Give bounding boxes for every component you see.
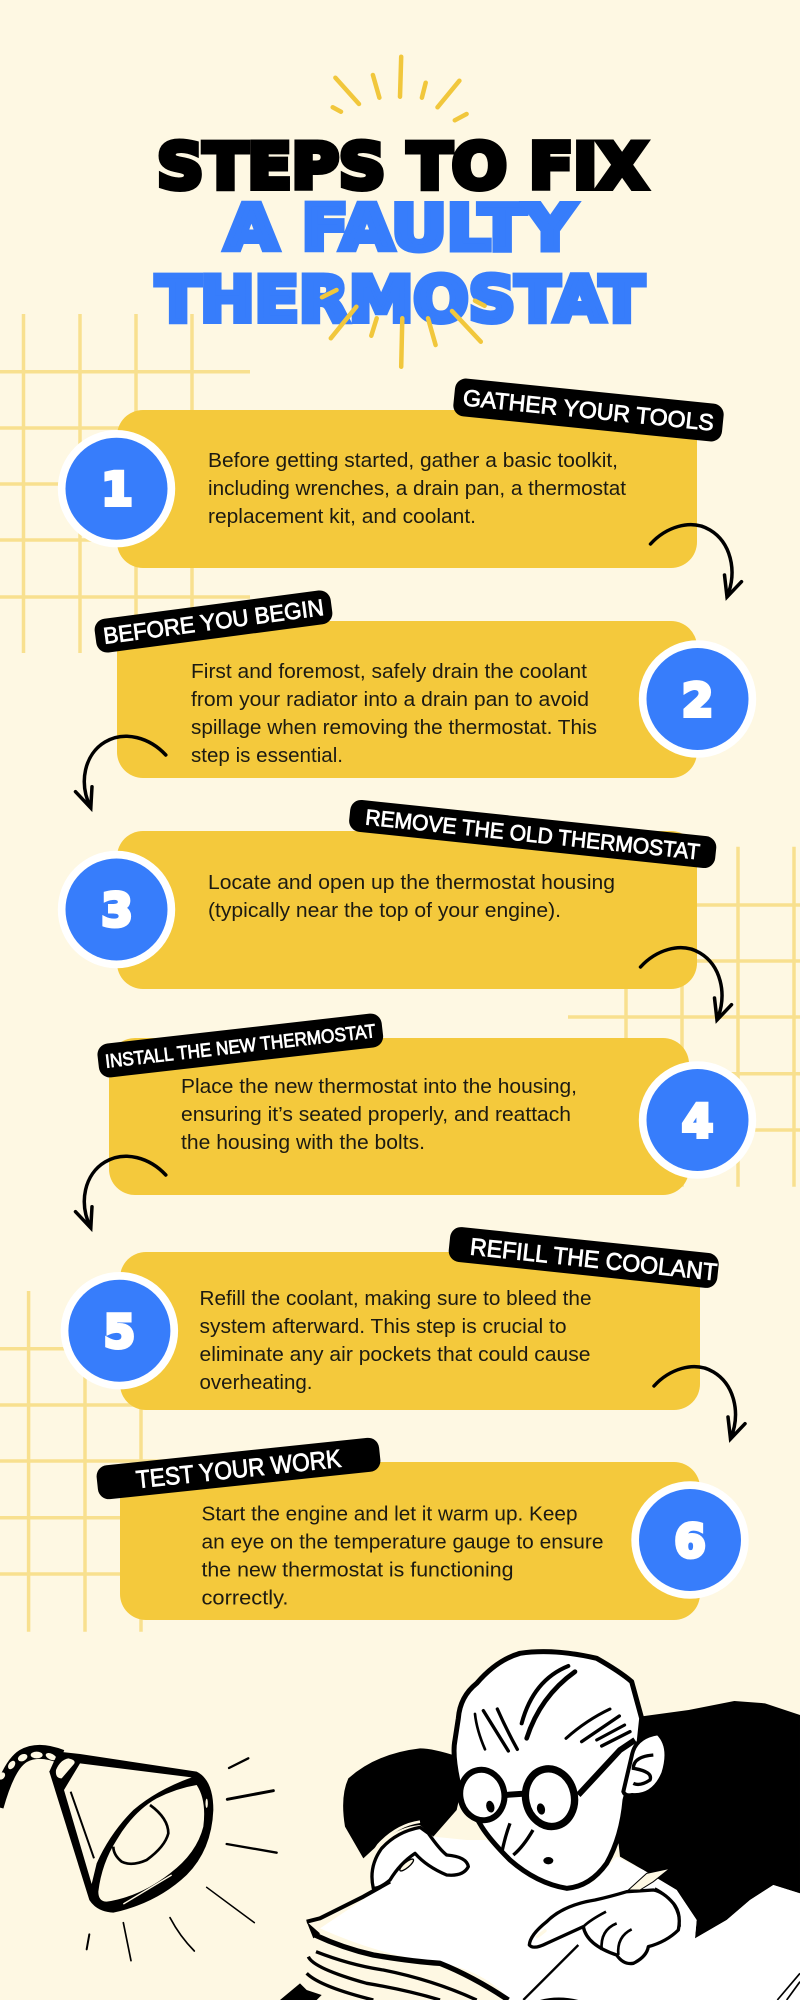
tag: refill the coolant: REFILL THE COOLANT [469,1234,719,1286]
panel: step 2: step is essential. [191,744,343,767]
sunburst: bottom rays [322,290,485,367]
tag: remove the old thermostat: REMOVE THE OLD THERMOSTAT [364,805,701,864]
arrow: step 4 to 5 [76,1156,166,1228]
title: A FAULTY [225,192,576,264]
title: STEPS TO FIX [157,130,647,203]
panel: step 4: the housing with the bolts. [181,1131,425,1154]
title [156,130,647,336]
panel: step 3: Locate and open up the thermostat housing [208,871,615,894]
panel: step 2: spillage when removing the thermostat. This [191,716,597,739]
panel: step 3 [58,799,732,1020]
panel: step 1: 1 [101,463,133,516]
panel: step 6: an eye on the temperature gauge to ensure [202,1531,604,1554]
panel: step 6: correctly. [202,1587,288,1610]
man's pointing hand [529,1890,679,1964]
panel: step 2 [76,589,756,808]
arrow: step 3 to 4 [640,948,732,1020]
panel: step 6: the new thermostat is functioning [202,1559,514,1582]
panel: step 2: 2 [682,674,713,727]
tag: test your work: TEST YOUR WORK [135,1445,343,1494]
panel: step 5: overheating. [200,1371,312,1394]
panel: step 3: (typically near the top of your engine). [208,899,561,922]
man's ear [623,1733,666,1795]
tag: install the new thermostat: INSTALL THE NEW THERMOSTAT [104,1021,377,1073]
panel: step 5: eliminate any air pockets that could cause [200,1343,590,1366]
panel: step 5: Refill the coolant, making sure to bleed the [200,1287,592,1310]
panel: step 4 [76,1012,756,1228]
man's glasses [456,1740,635,1831]
man's nose and mouth [502,1823,533,1855]
arrow: step 5 to 6 [654,1367,745,1439]
panel: step 4: ensuring it’s seated properly, and reattach [181,1103,571,1126]
lamp light rays [87,1758,277,1961]
tag: before you begin: BEFORE YOU BEGIN [102,594,325,649]
panel: step 6: 6 [674,1515,706,1568]
panel: step 1: Before getting started, gather a basic toolkit, [208,449,618,472]
man's left hand [368,1822,420,1887]
panel: step 2: from your radiator into a drain pan to avoid [191,688,589,711]
panel: step 3: 3 [101,884,133,937]
arrow: step 2 to 3 [76,736,166,808]
panel: step 6: Start the engine and let it warm up. Keep [202,1503,578,1526]
panel: step 1: replacement kit, and coolant. [208,505,476,528]
illustration: desk lamp [0,1752,277,1961]
panel: step 1: including wrenches, a drain pan, a thermostat [208,477,626,500]
man's head [454,1652,642,1888]
panel: step 1 [58,377,742,597]
panel: step 5: system afterward. This step is crucial to [200,1315,566,1338]
tag: gather your tools: GATHER YOUR TOOLS [462,384,715,436]
man's hair strokes [475,1666,630,1751]
tag: test your work [96,1437,381,1500]
sunburst: top rays [333,57,467,120]
illustration: man reading a book [280,1652,800,2000]
panel: step 4: Place the new thermostat into the housing, [181,1075,577,1098]
title: THERMOSTAT [156,263,644,336]
panel: step 2: First and foremost, safely drain the coolant [191,660,587,683]
panel: step 5: 5 [104,1306,135,1358]
open book [320,1837,800,2000]
panel: step 4: 4 [682,1095,713,1148]
arrow: step 1 to 2 [650,525,742,597]
man's coat [617,1701,800,1938]
panel: step 6 [96,1437,749,1620]
panel: step 5 [61,1226,745,1439]
